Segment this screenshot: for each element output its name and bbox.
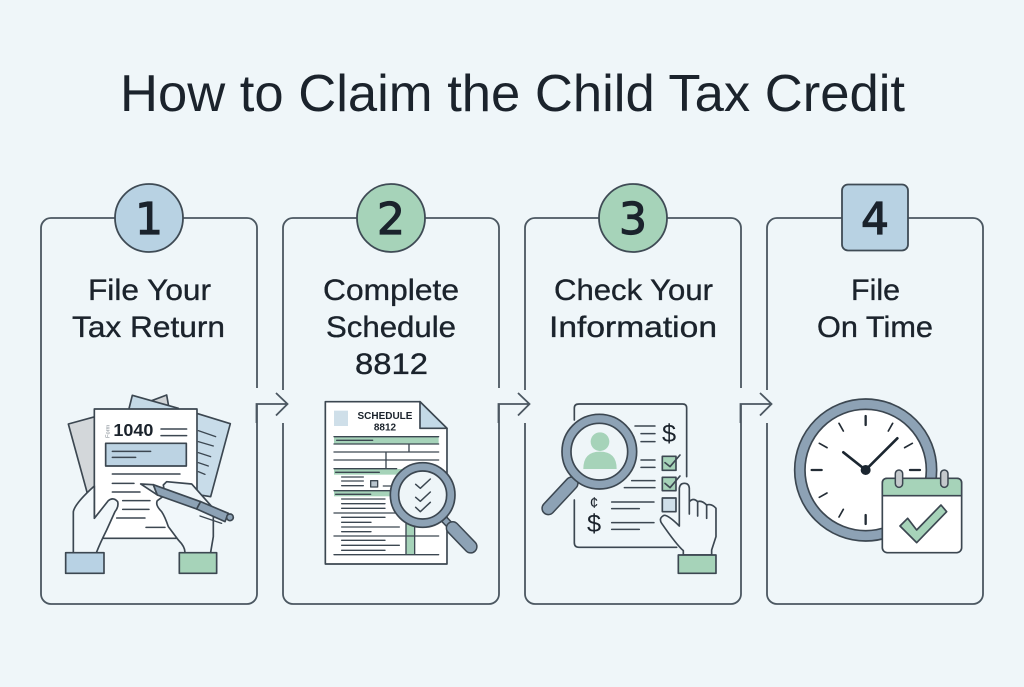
- icon: clock and calendar: [795, 399, 962, 553]
- heading: Complete Schedule 8812: [323, 274, 459, 381]
- icon: checklist with magnifier and pointing hand: ¢: [590, 495, 598, 512]
- icon: schedule 8812 with magnifier: SCHEDULE: [358, 411, 413, 422]
- heading: Complete Schedule 8812: 8812: [355, 348, 428, 381]
- number badge 3: [599, 184, 667, 252]
- panel: step 2: [283, 184, 499, 604]
- number badge 3: 3: [619, 194, 647, 245]
- heading: File Your Tax Return: File Your: [88, 274, 211, 307]
- panel: step 3: [525, 184, 741, 604]
- heading: File Your Tax Return: [72, 274, 225, 344]
- heading: File Your Tax Return: Tax Return: [72, 311, 225, 344]
- card outline 4: [767, 218, 983, 604]
- arrow: step 1 to 2: [256, 393, 288, 423]
- heading: Complete Schedule 8812: Schedule: [326, 311, 456, 344]
- icon: schedule 8812 with magnifier: [325, 402, 471, 564]
- clock: [795, 399, 937, 541]
- calendar: [882, 470, 962, 553]
- heading: File On Time: File: [851, 274, 900, 307]
- icon: schedule 8812 with magnifier: 8812: [374, 423, 397, 434]
- number badge 1: 1: [135, 194, 163, 245]
- icon: checklist with magnifier and pointing hand: $: [662, 420, 676, 448]
- number badge 4: 4: [861, 194, 889, 245]
- heading: File On Time: On Time: [817, 311, 933, 344]
- icon: checklist with magnifier and pointing hand: $: [587, 510, 601, 538]
- card outline 3: [525, 218, 741, 604]
- arrow: step 2 to 3: [498, 393, 530, 423]
- heading: Check Your Information: Check Your: [554, 274, 713, 307]
- card outline 1: [41, 218, 257, 604]
- number badge 2: [357, 184, 425, 252]
- arrow: step 3 to 4: [740, 393, 772, 423]
- icon: checklist with magnifier and pointing hand: [548, 404, 716, 573]
- heading: Complete Schedule 8812: Complete: [323, 274, 459, 307]
- panel: step 1: [41, 184, 257, 604]
- icon: form 1040 with hands and pen: Form: [105, 425, 111, 438]
- heading: File On Time: [817, 274, 933, 344]
- card outline 2: [283, 218, 499, 604]
- title: How to Claim the Child Tax Credit: [120, 65, 906, 123]
- number badge 1: [115, 184, 183, 252]
- number badge 4: [842, 184, 908, 250]
- panel: step 4: [767, 184, 983, 604]
- icon: form 1040 with hands and pen: [66, 395, 233, 573]
- heading: Check Your Information: [549, 274, 717, 344]
- heading: Check Your Information: Information: [549, 311, 717, 344]
- number badge 2: 2: [377, 194, 405, 245]
- icon: form 1040 with hands and pen: 1040: [113, 420, 153, 440]
